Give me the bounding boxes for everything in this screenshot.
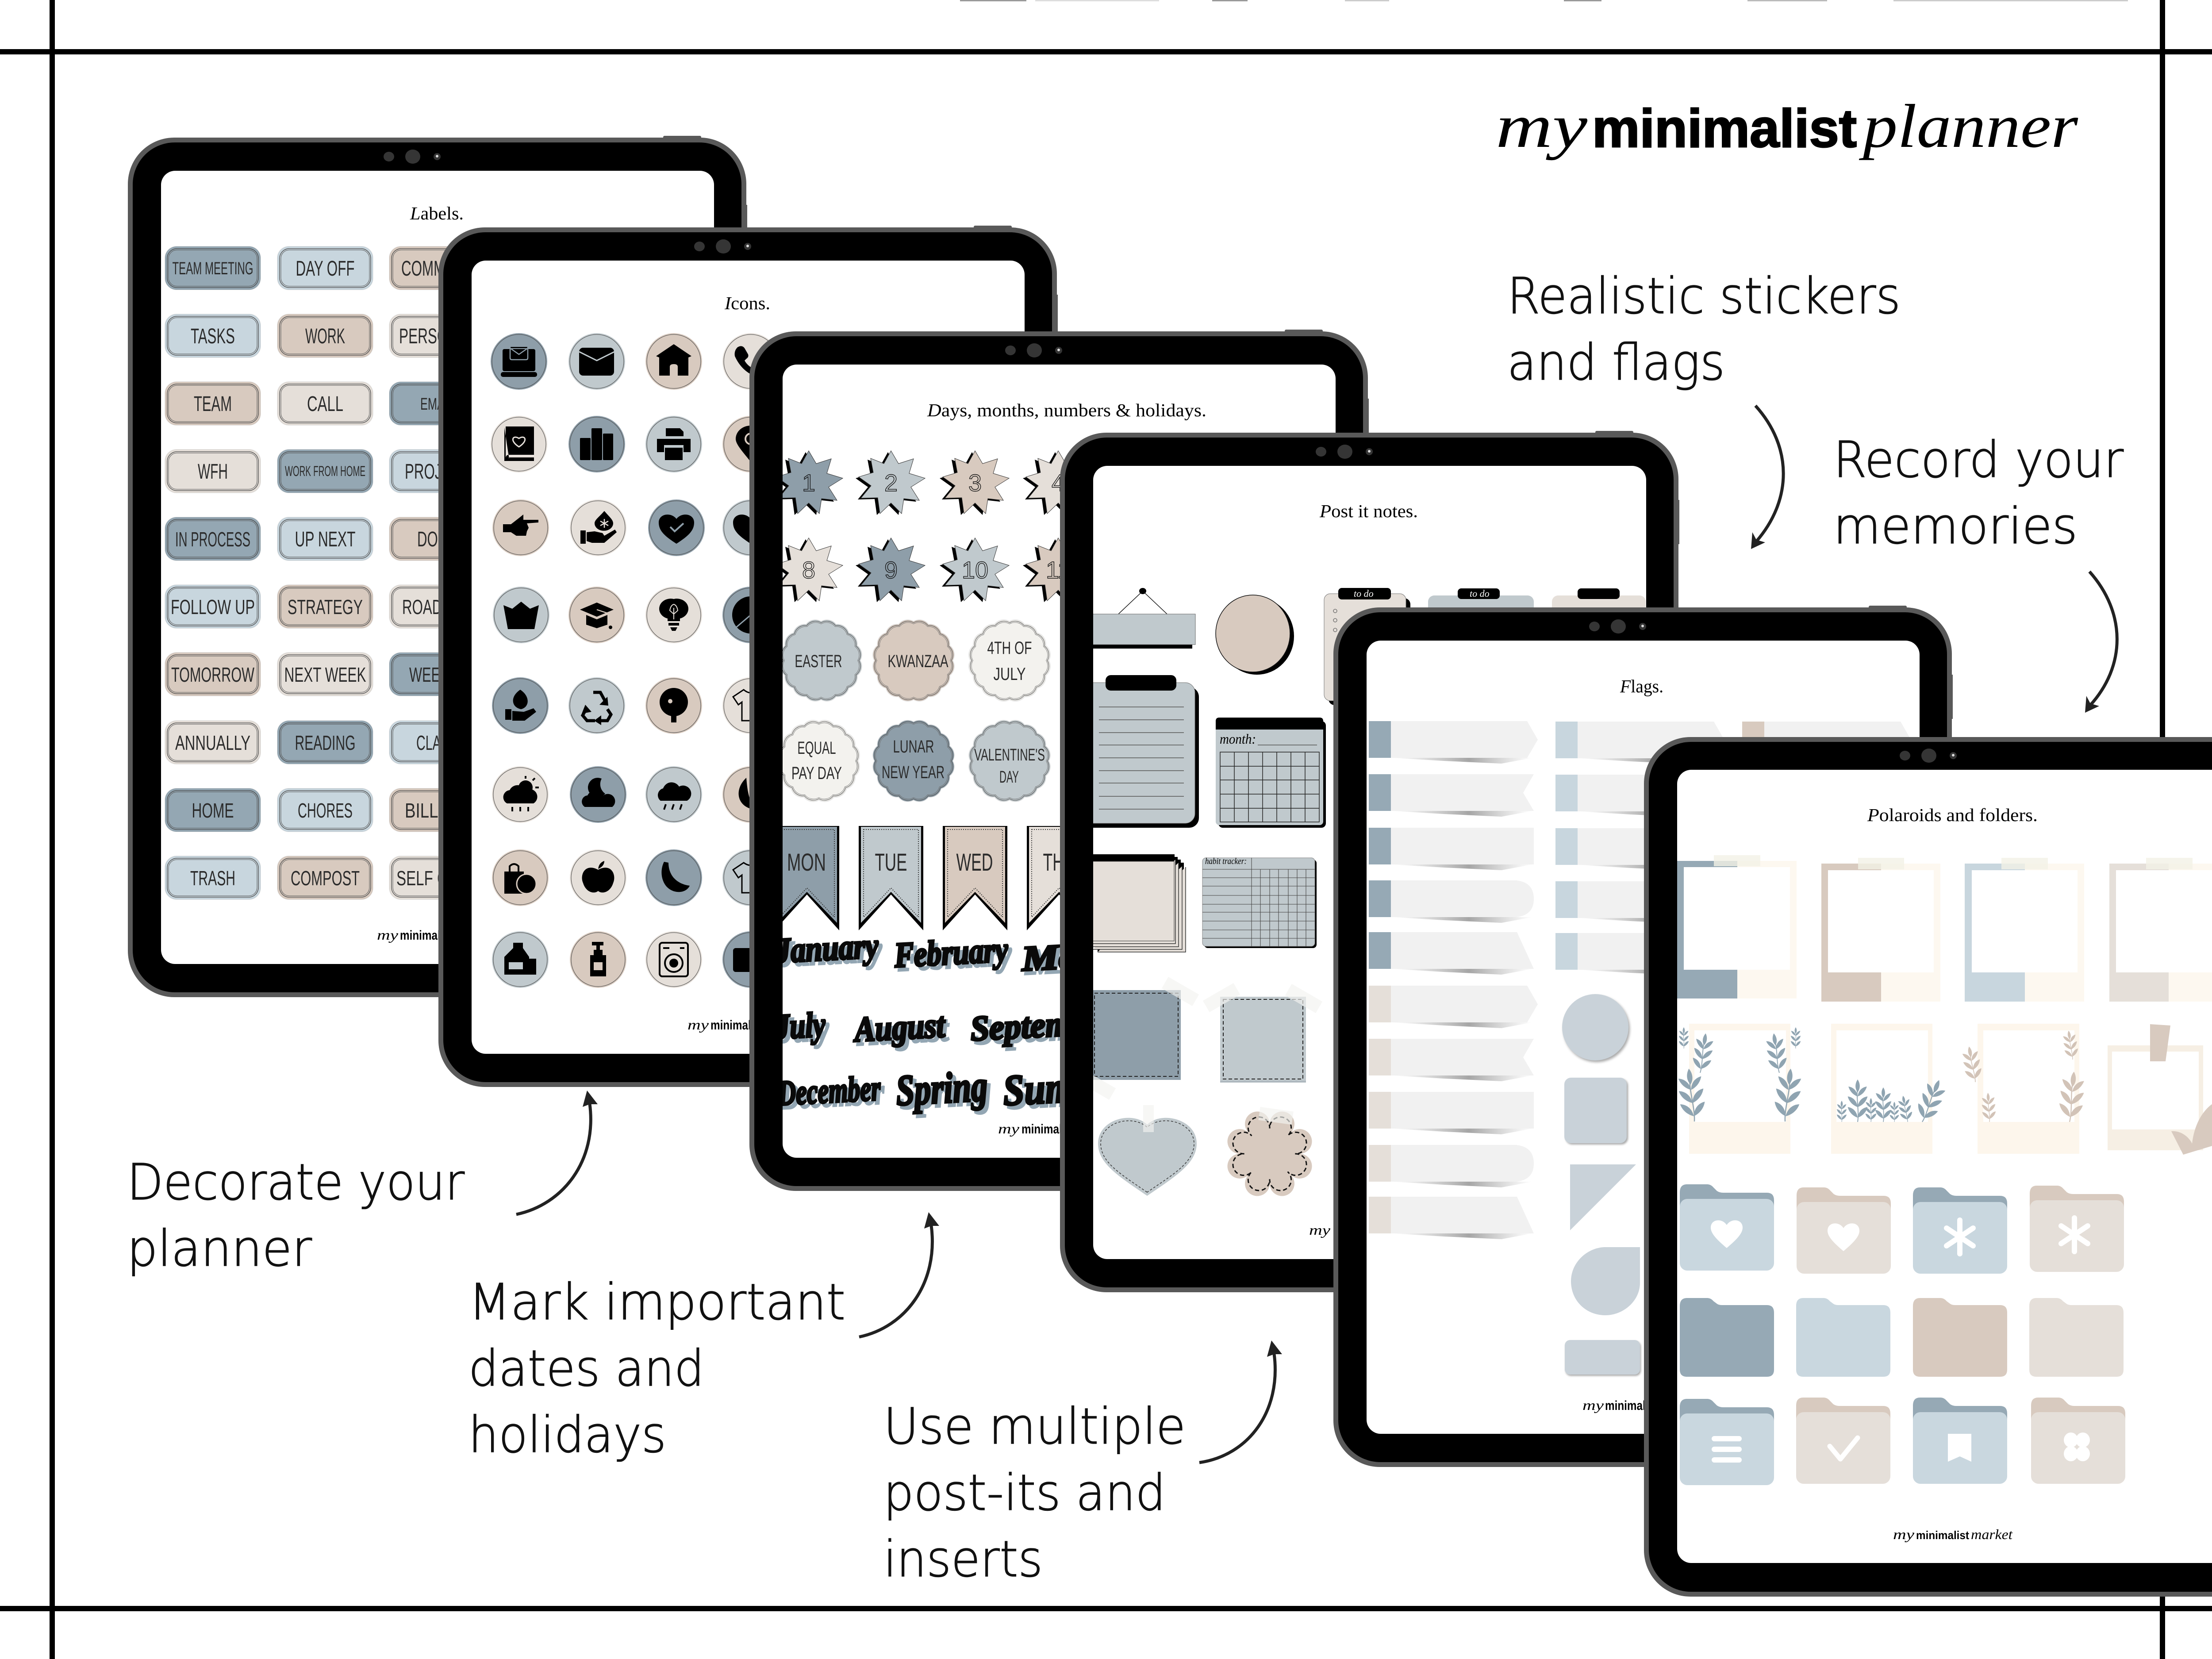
- icon: moon and cloud: [570, 766, 626, 823]
- label: CALL: CALL: [307, 392, 343, 416]
- folder: blue asterisk: [1913, 1187, 2007, 1274]
- folder: beige check: [1796, 1398, 1890, 1484]
- icon: apple tree: [645, 677, 702, 734]
- holiday badge: Lunar New Year: NEW YEAR: [882, 763, 945, 782]
- heading: Labels.: [410, 203, 464, 223]
- icon: envelope: [568, 333, 625, 390]
- caption: record your memories: Record your: [1833, 431, 2124, 489]
- label: BILLS: [389, 788, 485, 832]
- label: WEEKLY: WEEKLY: [409, 663, 465, 686]
- icon: laptop mail: [491, 333, 547, 390]
- heading: Flags.: [1620, 676, 1663, 696]
- label: ROADMAP: [389, 585, 485, 628]
- footer brand: my: [1309, 1222, 1331, 1238]
- flags column one blue: [1369, 721, 1538, 975]
- icon: bar chart: [568, 416, 625, 472]
- label: DONE: [389, 517, 485, 561]
- label: CLASS: [389, 721, 485, 764]
- footer brand: [1582, 1397, 1658, 1413]
- month sticker: December: [777, 1069, 885, 1117]
- label: HOME: HOME: [192, 799, 234, 822]
- day banner: THU: THU: [1043, 848, 1075, 876]
- holiday badge: Equal Pay Day: [778, 720, 860, 802]
- day banner: MON: [775, 826, 839, 930]
- holiday badge: 4th of July: [969, 620, 1050, 701]
- month sticker: March: March: [1023, 937, 1141, 982]
- folder: plain light blue: [1796, 1298, 1890, 1377]
- logo: my minimalist planner: [1496, 92, 2078, 161]
- number stars row one: 2: [884, 470, 898, 496]
- day banner: TUE: [859, 826, 923, 930]
- arrow: post-its to notes tablet: [1199, 1340, 1282, 1463]
- label: TEAM MEETING: [165, 246, 261, 290]
- month sticker: February: February: [893, 930, 1009, 975]
- label: SELF CARE: [389, 856, 485, 899]
- footer brand: minimalist: [710, 1018, 764, 1033]
- number stars row two: 8: [802, 557, 815, 584]
- footer brand: market: [1971, 1526, 2013, 1542]
- number stars row one: 1: [802, 470, 815, 496]
- panel: tablet polaroids and folders: [1644, 737, 2212, 1597]
- label: CALL: [277, 382, 373, 425]
- arrow: dates to calendar tablet: [859, 1212, 939, 1337]
- panel: tablet labels: [128, 136, 747, 997]
- caption: realistic stickers and flags: and flags: [1507, 334, 1725, 392]
- icon: soap pump: [570, 931, 626, 988]
- label: IN PROCESS: [165, 517, 261, 561]
- season sticker: Spring: Spring: [898, 1066, 992, 1118]
- footer brand: minimalist: [1916, 1528, 1969, 1542]
- caption: use multiple post-its and inserts: post-its and: [883, 1464, 1166, 1522]
- icon: shirt: [722, 677, 779, 734]
- icon: detergent bottle: [492, 931, 549, 988]
- scalloped flower note: [1227, 1107, 1312, 1196]
- number stars row two: 11: [1046, 557, 1071, 584]
- top edge remnants strip: [960, 0, 2128, 1]
- caption: mark important dates and holidays: dates and: [469, 1340, 704, 1398]
- polaroid tan: [1821, 858, 1940, 1002]
- caption: realistic stickers and flags: [1507, 268, 1901, 392]
- label: ANNUALLY: [165, 721, 261, 764]
- holiday badge: Lunar New Year: LUNAR: [893, 737, 934, 757]
- day banner: WED: WED: [956, 848, 993, 876]
- caption: record your memories: memories: [1833, 498, 2078, 555]
- label: TEAM MEETING: TEAM MEETING: [173, 259, 253, 278]
- caption: mark important dates and holidays: holidays: [469, 1406, 666, 1464]
- number stars row one: [773, 451, 1092, 515]
- holiday badge: Valentine's Day: [969, 720, 1050, 802]
- label: WORK FROM HOME: [277, 449, 373, 493]
- label: PROJECT: PROJECT: [405, 460, 469, 484]
- holiday badge: 4th of July: JULY: [994, 664, 1025, 684]
- holiday badge: Lunar New Year: [873, 720, 954, 802]
- footer brand: my: [687, 1017, 709, 1033]
- to do note slate: to do: [1470, 588, 1490, 599]
- label: CHORES: [277, 788, 373, 832]
- label: TEAM: [165, 382, 261, 425]
- to do note slate: [1428, 588, 1534, 702]
- holiday badge: Valentine's Day: VALENTINE'S: [974, 746, 1045, 764]
- to do note beige: to do: [1354, 588, 1374, 599]
- icon: apple bag: [492, 849, 549, 906]
- icon: t-shirt: [722, 849, 779, 906]
- label: ANNUALLY: ANNUALLY: [175, 731, 250, 754]
- label: FOLLOW UP: FOLLOW UP: [171, 595, 255, 618]
- footer brand: [687, 1017, 764, 1033]
- heading: Days, months, numbers & holidays.: [927, 400, 1206, 420]
- label: TRASH: [165, 856, 261, 899]
- hanging sign note: [1079, 588, 1195, 649]
- logo: my minimalist planner: planner: [1859, 92, 2078, 161]
- label: WEEKLY: [389, 653, 485, 696]
- polaroid with blue vines: [1677, 1024, 1803, 1154]
- number stars row two: [773, 538, 1092, 602]
- day banner: THU: [1027, 826, 1091, 930]
- label: READING: [277, 721, 373, 764]
- season sticker: Summer: Summer: [1005, 1064, 1141, 1118]
- month sticker: July: July: [775, 1005, 826, 1047]
- polaroid light blue: [1965, 858, 2084, 1002]
- triangle flag: [1570, 1164, 1636, 1230]
- label: ROADMAP: ROADMAP: [402, 595, 472, 618]
- habit tracker note: habit tracker:: [1205, 856, 1247, 866]
- icon: no phone: [722, 587, 779, 643]
- icon: mail check: [722, 931, 779, 988]
- icon: pointing hand: [492, 499, 549, 556]
- panel: tablet days months numbers holidays: [749, 330, 1369, 1191]
- label: NEXT WEEK: NEXT WEEK: [284, 663, 366, 686]
- footer brand: minimalist: [1605, 1398, 1658, 1413]
- icon: hand with drop: [570, 499, 626, 556]
- caption: decorate your planner: Decorate your: [127, 1154, 465, 1211]
- label: WFH: [165, 449, 261, 493]
- label: DAY OFF: [277, 246, 373, 290]
- polaroid with clothespin: [2108, 1024, 2212, 1155]
- number stars row one: 4: [1052, 470, 1065, 496]
- footer brand: my: [1582, 1397, 1604, 1413]
- taped square note dark: [1079, 977, 1199, 1100]
- label: WFH: WFH: [198, 460, 228, 484]
- label: WORK FROM HOME: WORK FROM HOME: [285, 463, 365, 479]
- caption: mark important dates and holidays: [469, 1274, 845, 1464]
- icon: plant in hand: [492, 677, 549, 734]
- icon: banana: [645, 849, 702, 906]
- label: FOLLOW UP: [165, 585, 261, 628]
- holiday badge: Kwanzaa: [873, 620, 954, 701]
- heading: Polaroids and folders.: [1867, 805, 2038, 825]
- label: IN PROCESS: IN PROCESS: [175, 528, 250, 551]
- label: TOMORROW: TOMORROW: [171, 663, 254, 686]
- icon: sun behind cloud: [492, 766, 549, 823]
- heading: Post it notes.: [1319, 501, 1418, 521]
- to do note pale: [1552, 588, 1646, 702]
- label: BILLS: BILLS: [405, 799, 449, 822]
- label: COMMUTE: [389, 246, 448, 290]
- folder: beige asterisk: [2030, 1186, 2124, 1272]
- footer brand: [998, 1121, 1075, 1137]
- polaroid blue: [1677, 855, 1797, 998]
- caption: record your memories: [1833, 431, 2124, 555]
- folder: plain beige: [2029, 1298, 2124, 1377]
- footer brand: minimalist: [1022, 1122, 1075, 1137]
- arrow: memories down to polaroids tablet: [2085, 572, 2117, 713]
- label: WORK: [277, 314, 373, 357]
- footer brand: [377, 927, 453, 943]
- label: WORK: WORK: [305, 325, 345, 348]
- icon: crown: [493, 587, 549, 643]
- tablet frame: [438, 226, 1058, 1087]
- caption: use multiple post-its and inserts: inserts: [883, 1531, 1043, 1588]
- label: TEAM: TEAM: [194, 392, 232, 416]
- month sticker: September: September: [969, 1002, 1118, 1048]
- icon: house: [645, 333, 702, 390]
- month sticker: August: August: [855, 1009, 950, 1053]
- logo: my minimalist planner: minimalist: [1592, 98, 1857, 158]
- icon: book with heart: [491, 416, 547, 472]
- arrow: decorate to labels tablet: [516, 1091, 598, 1214]
- footer brand: minimalist: [400, 928, 453, 943]
- month sticker: March: March: [1020, 933, 1138, 979]
- holiday badge: Equal Pay Day: EQUAL: [797, 738, 836, 758]
- label: PERSONAL: [389, 314, 485, 357]
- folder: plain dark blue: [1680, 1298, 1774, 1377]
- tablet frame: [1333, 606, 1953, 1467]
- tablet frame: [128, 136, 747, 997]
- holiday badge: Easter: EASTER: [795, 652, 842, 671]
- month sticker: January: January: [774, 926, 879, 971]
- taped square note slate: [1203, 983, 1322, 1083]
- footer brand: [1893, 1526, 2013, 1542]
- bar flag: [1565, 1340, 1640, 1375]
- monthly calendar note: [1216, 718, 1326, 828]
- icon: lightbulb: [645, 587, 702, 643]
- icon: map pin: [722, 416, 779, 472]
- icon: rain cloud: [645, 766, 702, 823]
- caption: decorate your planner: [127, 1154, 465, 1278]
- day banner: WED: [943, 826, 1007, 930]
- polaroid with blue plants: [1831, 1024, 1949, 1154]
- icon: washing machine: [645, 931, 702, 988]
- folder: beige heart: [1797, 1187, 1891, 1274]
- label: UP NEXT: [277, 517, 373, 561]
- label: NEXT WEEK: [277, 653, 373, 696]
- icon: phone: [722, 333, 779, 390]
- icon: heart check: [648, 499, 705, 556]
- round flag: [1562, 994, 1628, 1060]
- footer brand: my: [1893, 1526, 1915, 1542]
- caption: mark important dates and holidays: Mark important: [469, 1274, 845, 1331]
- polaroid with tan sprigs: [1961, 1024, 2085, 1154]
- month sticker: September: September: [973, 1006, 1121, 1052]
- folder: blue heart: [1680, 1184, 1774, 1271]
- label: DONE: DONE: [417, 528, 457, 551]
- square flag: [1564, 1078, 1627, 1143]
- icon: apple: [570, 849, 626, 906]
- folder: plain tan: [1913, 1298, 2007, 1377]
- caption: decorate your planner: planner: [127, 1220, 312, 1278]
- folder: blue bookmark: [1913, 1398, 2007, 1484]
- label: PROJECT: [389, 449, 485, 493]
- holiday badge: Easter: [780, 620, 862, 701]
- label: COMPOST: [277, 856, 373, 899]
- arrow: stickers down to flags tablet: [1751, 406, 1783, 549]
- panel: tablet flags: [1333, 606, 1953, 1467]
- label: STRATEGY: [277, 585, 373, 628]
- panel: tablet post it notes: [1060, 431, 1679, 1292]
- footer brand: my: [998, 1121, 1020, 1137]
- icon: leaf: [722, 766, 779, 823]
- panel: tablet icons: [438, 226, 1058, 1087]
- number stars row two: 10: [962, 557, 988, 584]
- round note: [1216, 595, 1294, 675]
- month sticker: December: December: [777, 1069, 882, 1113]
- label: CLASS: CLASS: [416, 731, 458, 754]
- label: PERSONAL: PERSONAL: [399, 325, 475, 348]
- holiday badge: Kwanzaa: KWANZAA: [887, 652, 949, 671]
- caption: use multiple post-its and inserts: [883, 1398, 1186, 1588]
- month sticker: January: January: [778, 930, 883, 974]
- to do note beige: [1324, 588, 1410, 705]
- holiday badge: 4th of July: 4TH OF: [987, 638, 1032, 658]
- polaroid beige: [2109, 858, 2212, 1002]
- month sticker: February: February: [897, 934, 1013, 979]
- stacked paper note: [1079, 854, 1186, 952]
- caption: realistic stickers and flags: Realistic stickers: [1507, 268, 1901, 325]
- month sticker: July: July: [778, 1009, 830, 1050]
- drop flag: [1571, 1247, 1640, 1315]
- label: SELF CARE: SELF CARE: [396, 867, 478, 890]
- icon: recycle: [568, 677, 625, 734]
- icon: printer: [645, 416, 702, 472]
- heart note: [1098, 1105, 1197, 1196]
- label: CHORES: CHORES: [298, 799, 353, 822]
- month sticker: August: August: [852, 1006, 947, 1049]
- label: TASKS: TASKS: [191, 325, 235, 348]
- label: EMAIL: [389, 382, 485, 425]
- day banner: MON: MON: [787, 848, 826, 876]
- tablet frame: [1060, 431, 1679, 1292]
- season sticker: Summer: Summer: [1002, 1060, 1137, 1115]
- holiday badge: Equal Pay Day: PAY DAY: [791, 764, 842, 783]
- number stars row one: 3: [968, 470, 982, 496]
- footer brand: my: [377, 927, 399, 943]
- month sticker: December: December: [780, 1072, 885, 1117]
- monthly calendar note: month:: [1220, 731, 1256, 747]
- label: COMMUTE: COMMUTE: [401, 257, 473, 280]
- flags column two light blue: [1555, 722, 1724, 975]
- flags column three tan: [1742, 722, 1911, 764]
- heading: Icons.: [724, 293, 770, 313]
- logo: my minimalist planner: my: [1496, 92, 1588, 161]
- season sticker: Spring: Spring: [895, 1062, 989, 1115]
- label: HOME: [165, 788, 261, 832]
- lined clipboard note: [1079, 675, 1199, 828]
- holiday badge: Valentine's Day: DAY: [999, 768, 1019, 787]
- flags column one beige: [1369, 986, 1538, 1239]
- label: UP NEXT: UP NEXT: [295, 528, 356, 551]
- label: EMAIL: EMAIL: [420, 395, 454, 414]
- tablet frame: [749, 330, 1369, 1191]
- label: READING: READING: [295, 731, 356, 754]
- caption: use multiple post-its and inserts: Use multiple: [883, 1398, 1186, 1455]
- tablet frame: [1644, 737, 2212, 1597]
- icon: heart mark: [722, 499, 779, 556]
- habit tracker note: [1202, 856, 1317, 948]
- folder: blue list: [1680, 1399, 1774, 1485]
- label: TOMORROW: [165, 653, 261, 696]
- day banner: TUE: TUE: [875, 848, 907, 876]
- number stars row two: 9: [884, 557, 898, 584]
- icon: graduation cap: [568, 587, 625, 643]
- label: TRASH: TRASH: [190, 867, 235, 890]
- label: DAY OFF: DAY OFF: [296, 257, 355, 280]
- folder: beige clover: [2031, 1398, 2125, 1484]
- label: COMPOST: COMPOST: [291, 867, 360, 890]
- label: STRATEGY: STRATEGY: [288, 595, 363, 618]
- label: TASKS: [165, 314, 261, 357]
